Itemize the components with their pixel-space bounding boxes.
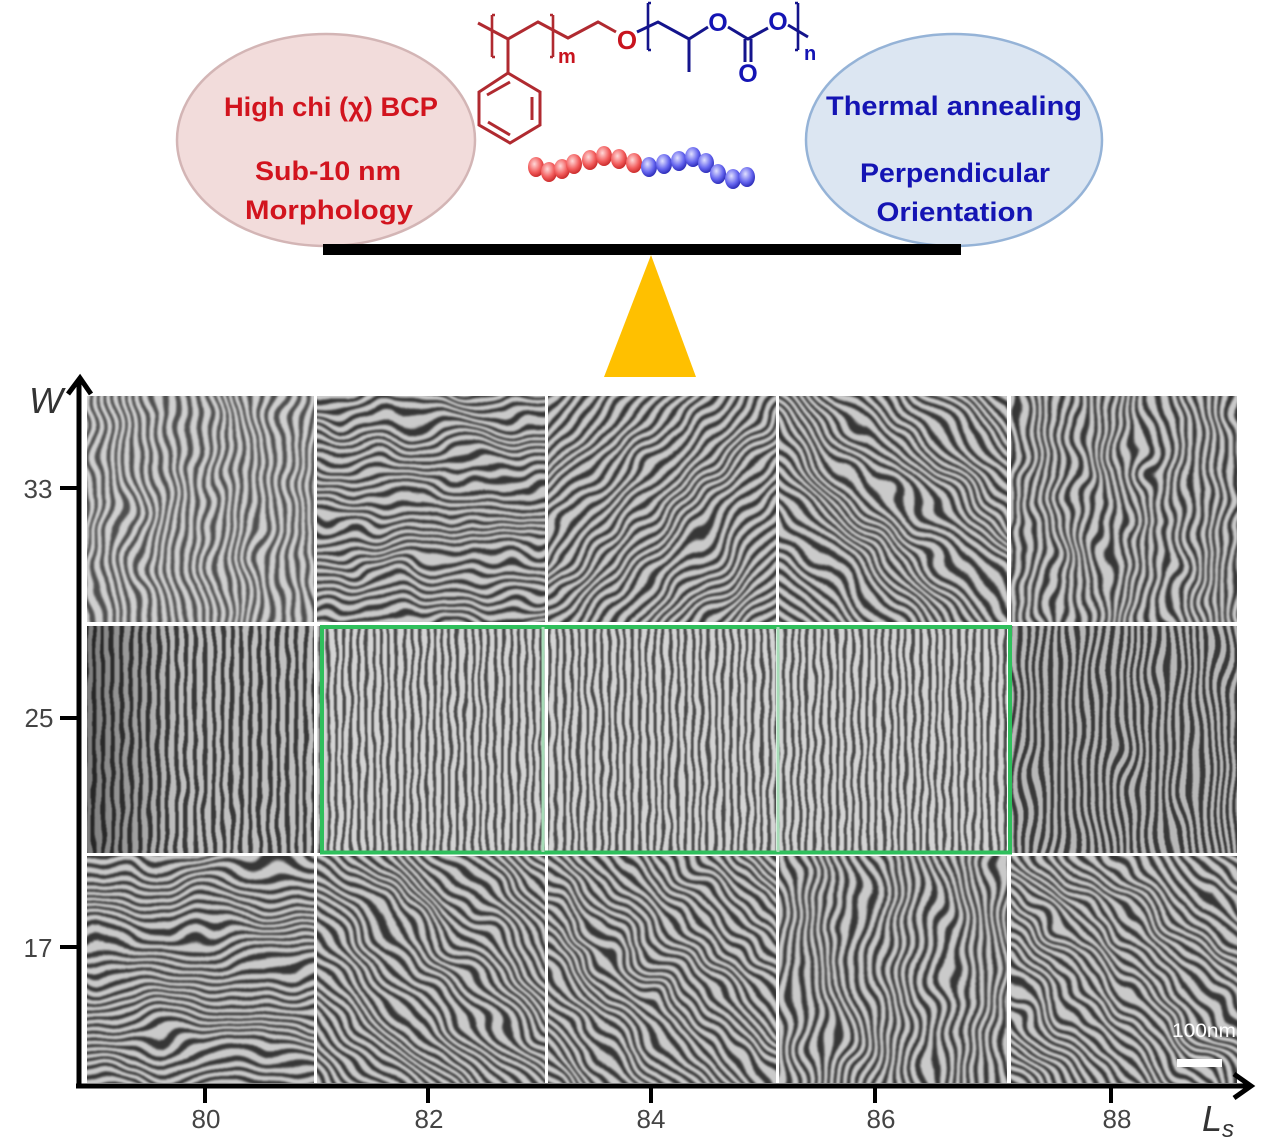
balance beam (323, 244, 961, 255)
chemical structure: polycarbonate block: O (708, 9, 728, 37)
scale bar: 100 nm (1172, 1021, 1236, 1067)
x axis with ticks and labels: 82 (415, 1104, 443, 1134)
panel: left ellipse, high chi BCP: Sub-10 nm (255, 156, 401, 186)
panel: right ellipse, thermal annealing: Thermal annealing (826, 91, 1082, 121)
x axis with ticks and labels: 88 (1103, 1104, 1131, 1134)
y axis with ticks and labels: W (29, 380, 66, 421)
chemical structure: polycarbonate block: n (804, 43, 816, 65)
panel: micrograph row W=17 (87, 856, 1237, 1083)
chemical structure: polycarbonate block (637, 3, 816, 88)
panel: right ellipse, thermal annealing: Orientation (876, 197, 1034, 227)
chemical structure: polystyrene block: m (558, 46, 576, 68)
x axis with ticks and labels: 86 (867, 1104, 895, 1134)
panel: left ellipse, high chi BCP (177, 34, 475, 246)
y axis with ticks and labels: 17 (24, 933, 52, 963)
panel: micrograph row W=33 (87, 396, 1237, 622)
chemical structure: polystyrene block (478, 15, 637, 143)
x axis with ticks and labels: 80 (192, 1104, 220, 1134)
panel: left ellipse, high chi BCP: Morphology (245, 195, 413, 225)
chemical structure: polystyrene block: O (617, 25, 637, 55)
y axis with ticks and labels: 33 (24, 474, 52, 504)
x axis with ticks and labels (76, 1074, 1251, 1143)
chemical structure: polycarbonate block: O (768, 8, 788, 36)
y axis with ticks and labels: 25 (25, 703, 53, 733)
scale bar: 100 nm: 100nm (1172, 1021, 1236, 1042)
y axis with ticks and labels (24, 378, 91, 1087)
panel: right ellipse, thermal annealing: Perpendicular (860, 158, 1051, 188)
panel: right ellipse, thermal annealing (806, 34, 1102, 246)
x axis with ticks and labels: L (1202, 1098, 1222, 1139)
panel: micrograph row W=25, vertical lamellae (87, 626, 1237, 853)
x axis with ticks and labels: s (1222, 1116, 1234, 1143)
bead chain: red and blue blocks (528, 146, 755, 189)
chemical structure: polycarbonate block: O (738, 60, 758, 88)
green highlight box (322, 627, 1010, 852)
panel: left ellipse, high chi BCP: High chi (χ) BCP (224, 92, 438, 122)
balance fulcrum triangle (604, 255, 696, 377)
x axis with ticks and labels: 84 (637, 1104, 665, 1134)
